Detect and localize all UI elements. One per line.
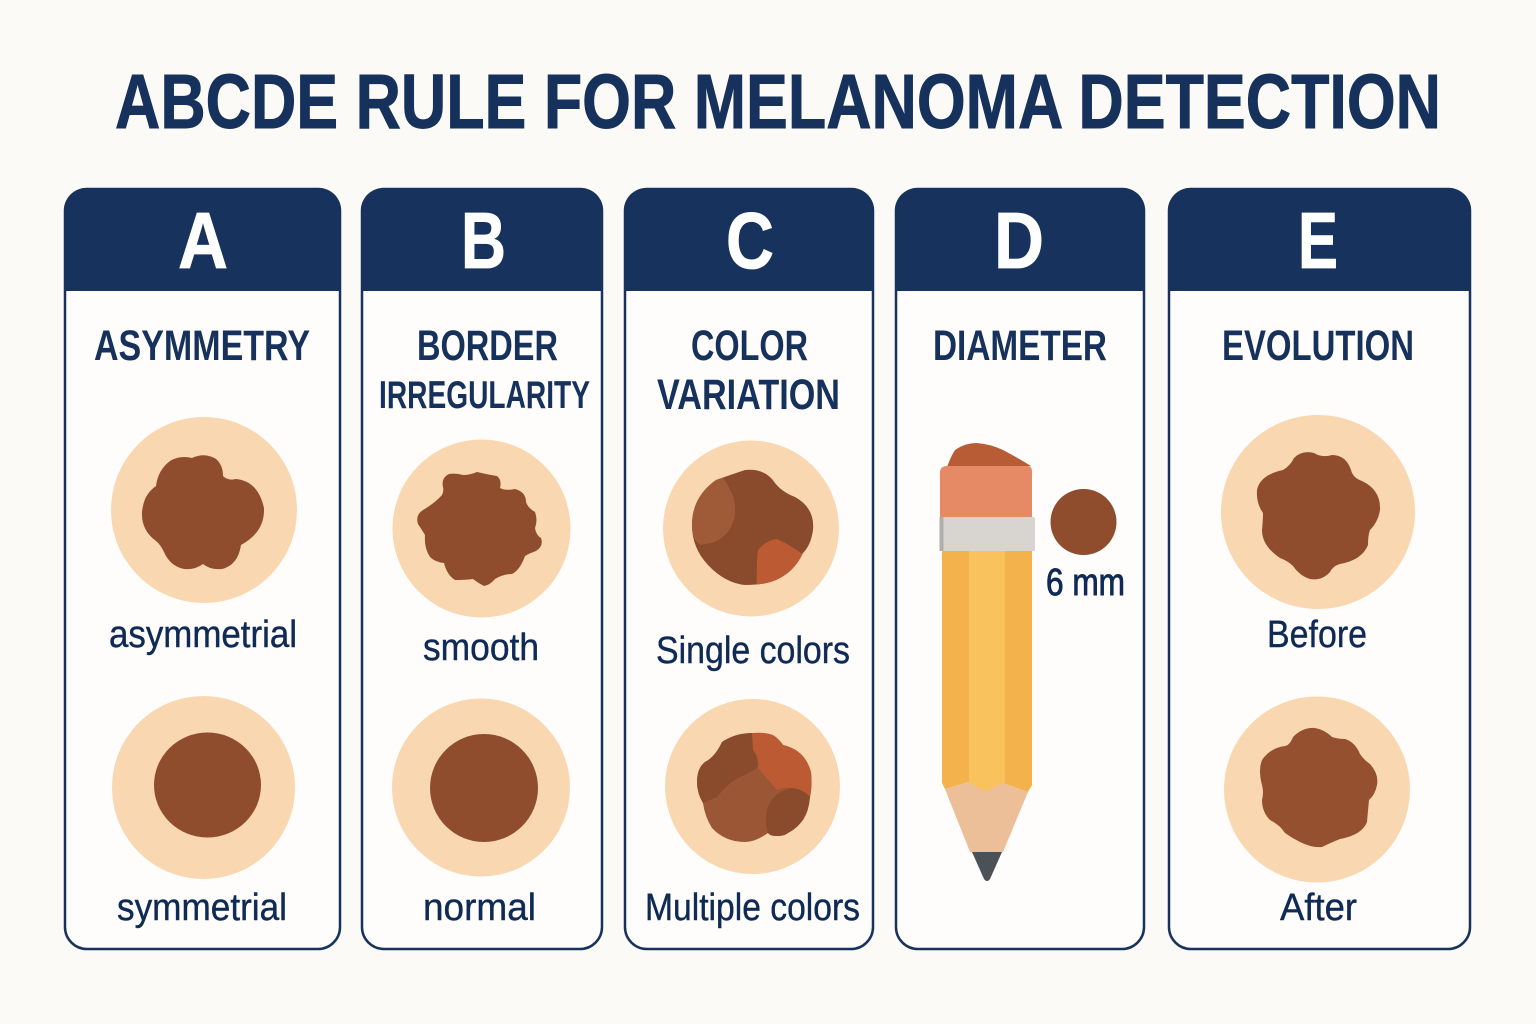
- heading: asymmetry: ASYMMETRY: [94, 322, 310, 370]
- panel: E evolution: [1169, 189, 1470, 949]
- heading: diameter: DIAMETER: [933, 322, 1107, 370]
- heading: border irregularity: [379, 322, 590, 417]
- label: smooth: smooth: [423, 627, 539, 669]
- label: asymmetrial: asymmetrial: [109, 614, 297, 656]
- heading: border irregularity: BORDER: [417, 322, 558, 370]
- heading: border irregularity: IRREGULARITY: [379, 374, 590, 417]
- icon: mole with few colors: [663, 440, 839, 616]
- header band D: [896, 189, 1144, 291]
- icon: mole with multiple colors: [665, 699, 840, 874]
- header band B: [362, 189, 602, 291]
- header band C: [625, 189, 873, 291]
- letter E: E: [1298, 196, 1338, 285]
- heading: color variation: COLOR: [691, 322, 808, 370]
- header band A: [65, 189, 340, 291]
- icon: pencil: [940, 443, 1035, 881]
- header band E: [1169, 189, 1470, 291]
- heading: evolution: EVOLUTION: [1222, 322, 1414, 370]
- panel: A asymmetry: [65, 189, 340, 949]
- heading: color variation: [657, 322, 840, 419]
- label: normal: normal: [423, 887, 536, 929]
- icon: mole after: [1224, 696, 1410, 882]
- icon: irregular border mole: [392, 440, 570, 618]
- icon: mole before: [1221, 415, 1415, 609]
- letter C: C: [726, 196, 774, 285]
- label: 6 mm: 6 mm: [1046, 562, 1125, 604]
- icon: 6 mm reference dot: [1050, 489, 1116, 555]
- panel: D diameter: [896, 189, 1144, 949]
- label: single colors: Single colors: [656, 630, 850, 672]
- label: symmetrial: symmetrial: [117, 887, 287, 929]
- letter A: A: [178, 196, 228, 285]
- label: multiple colors: Multiple colors: [645, 887, 860, 929]
- letter D: D: [994, 196, 1044, 285]
- label: before: Before: [1267, 614, 1367, 656]
- letter B: B: [461, 196, 506, 285]
- icon: asymmetrical mole: [111, 417, 297, 603]
- icon: symmetrical mole: [112, 696, 295, 879]
- panel: B border irregularity: [362, 189, 602, 949]
- heading: color variation: VARIATION: [657, 371, 840, 419]
- label: after: After: [1280, 887, 1357, 929]
- panel: C color variation: [625, 189, 873, 949]
- icon: normal mole: [392, 698, 570, 876]
